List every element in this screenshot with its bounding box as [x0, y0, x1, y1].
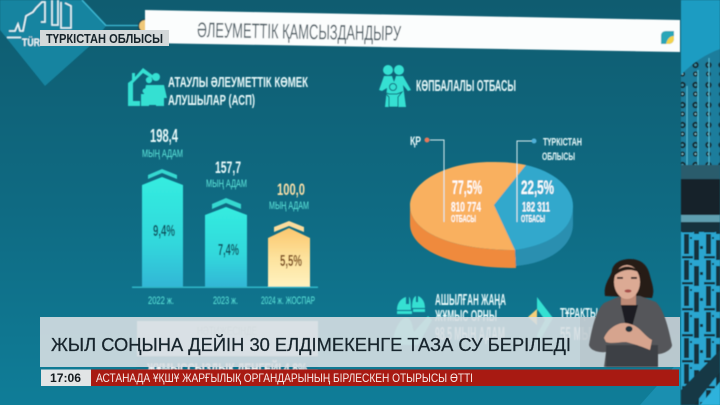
logo icon — [661, 31, 674, 44]
sign language interpreter — [589, 259, 672, 367]
bar 2022: 2022 ж. — [148, 295, 174, 307]
bar 2024 plan: 100,0 — [277, 180, 305, 199]
lower-third headline — [40, 317, 680, 367]
bar 2023: 157,7 — [215, 158, 241, 177]
blue slice label: 22,5% — [521, 178, 554, 199]
icon: house with family — [128, 68, 167, 106]
panel: social assistance recipients — [128, 68, 318, 307]
orange slice label: ОТБАСЫ — [451, 214, 476, 225]
bar 2023: 7,4% — [218, 242, 239, 259]
bar 2022: 9,4% — [153, 223, 175, 240]
heading: new jobs: ЖҰМЫС ОРНЫ — [434, 308, 497, 325]
orange slice label: 810 774 — [451, 198, 481, 214]
heading: stable: ТҰРАҚТЫ — [560, 305, 598, 322]
panel: new jobs — [392, 292, 598, 345]
bar 2023: МЫҢ АДАМ — [206, 178, 247, 190]
hidden slide footer box: НӘТИЖЕСІНДЕ — [197, 324, 257, 338]
heading: АТАУЛЫ ӘЛЕУМЕТТІК КӨМЕК — [168, 74, 309, 91]
callout: republic — [410, 134, 444, 222]
panel: new jobs: 98,5 МЫҢ АДАМ — [435, 324, 505, 344]
hands — [604, 323, 652, 350]
hair — [605, 259, 653, 298]
bar 2022 — [142, 126, 183, 307]
heading: stable — [560, 305, 598, 344]
bar 2023: 2023 ж. — [213, 295, 238, 307]
slide title: ӘЛЕУМЕТТІК ҚАМСЫЗДАНДЫРУ — [197, 19, 402, 46]
channel corner graphic — [0, 0, 152, 86]
callout: Turkistan region — [517, 136, 582, 222]
bar 2022: 198,4 — [150, 126, 178, 146]
heading — [168, 74, 309, 109]
neck and face — [621, 293, 636, 305]
bar 2024 plan: МЫҢ АДАМ — [269, 200, 309, 212]
inner top — [621, 305, 638, 327]
jacket — [589, 296, 672, 367]
clock — [41, 370, 91, 386]
bar 2022: МЫҢ АДАМ — [142, 148, 183, 160]
orange slice label — [451, 178, 482, 225]
icon: family — [379, 65, 411, 107]
heading: new jobs: АШЫЛҒАН ЖАҢА — [435, 292, 506, 309]
panel: large families — [379, 65, 582, 268]
clock: 17:06 — [50, 371, 81, 385]
news ticker — [91, 370, 679, 386]
bar 2024 plan: 5,5% — [280, 253, 302, 270]
bar 2023 — [205, 158, 247, 307]
bar chart — [132, 126, 318, 307]
pie chart — [410, 162, 573, 268]
blue slice label: 182 311 — [522, 198, 550, 214]
channel corner graphic: TÜR — [22, 36, 40, 49]
location tag: ТҮРКІСТАН ОБЛЫСЫ — [46, 32, 163, 46]
hidden slide footer box — [137, 321, 318, 376]
heading: stable: 55 МЫҢ — [560, 324, 598, 344]
callout: republic: ҚР — [410, 134, 421, 148]
blue slice label: ОТБАСЫ — [521, 214, 545, 225]
white title band — [145, 10, 680, 52]
hidden slide footer box: ЖҰМЫССЫЗДЫҚ ДЕҢГЕЙІ 4,8% — [146, 359, 307, 376]
orange slice label: 77,5% — [452, 178, 482, 199]
blue slice label — [521, 178, 554, 225]
icon: helmet workers — [392, 296, 432, 345]
bar 2024 plan: 2024 ж. ЖОСПАР — [261, 295, 315, 307]
callout: Turkistan region: ОБЛЫСЫ — [542, 151, 575, 163]
heading: new jobs — [434, 292, 506, 344]
heading: АЛУШЫЛАР (АСП) — [168, 92, 255, 109]
lower-third headline: ЖЫЛ СОҢЫНА ДЕЙІН 30 ЕЛДІМЕКЕНГЕ ТАЗА СУ БЕРІЛЕДІ — [51, 334, 571, 355]
callout: Turkistan region: ТҮРКІСТАН — [543, 136, 582, 148]
icon: chevrons — [528, 297, 553, 345]
heading: КӨПБАЛАЛЫ ОТБАСЫ — [416, 78, 516, 95]
right decorative stripe — [681, 0, 720, 405]
bar 2024 plan — [261, 180, 315, 307]
news ticker: АСТАНАДА ҰҚШҰ ЖАРҒЫЛЫҚ ОРГАНДАРЫНЫҢ БІРЛЕСКЕН ОТЫРЫСЫ ӨТТІ — [96, 371, 473, 385]
